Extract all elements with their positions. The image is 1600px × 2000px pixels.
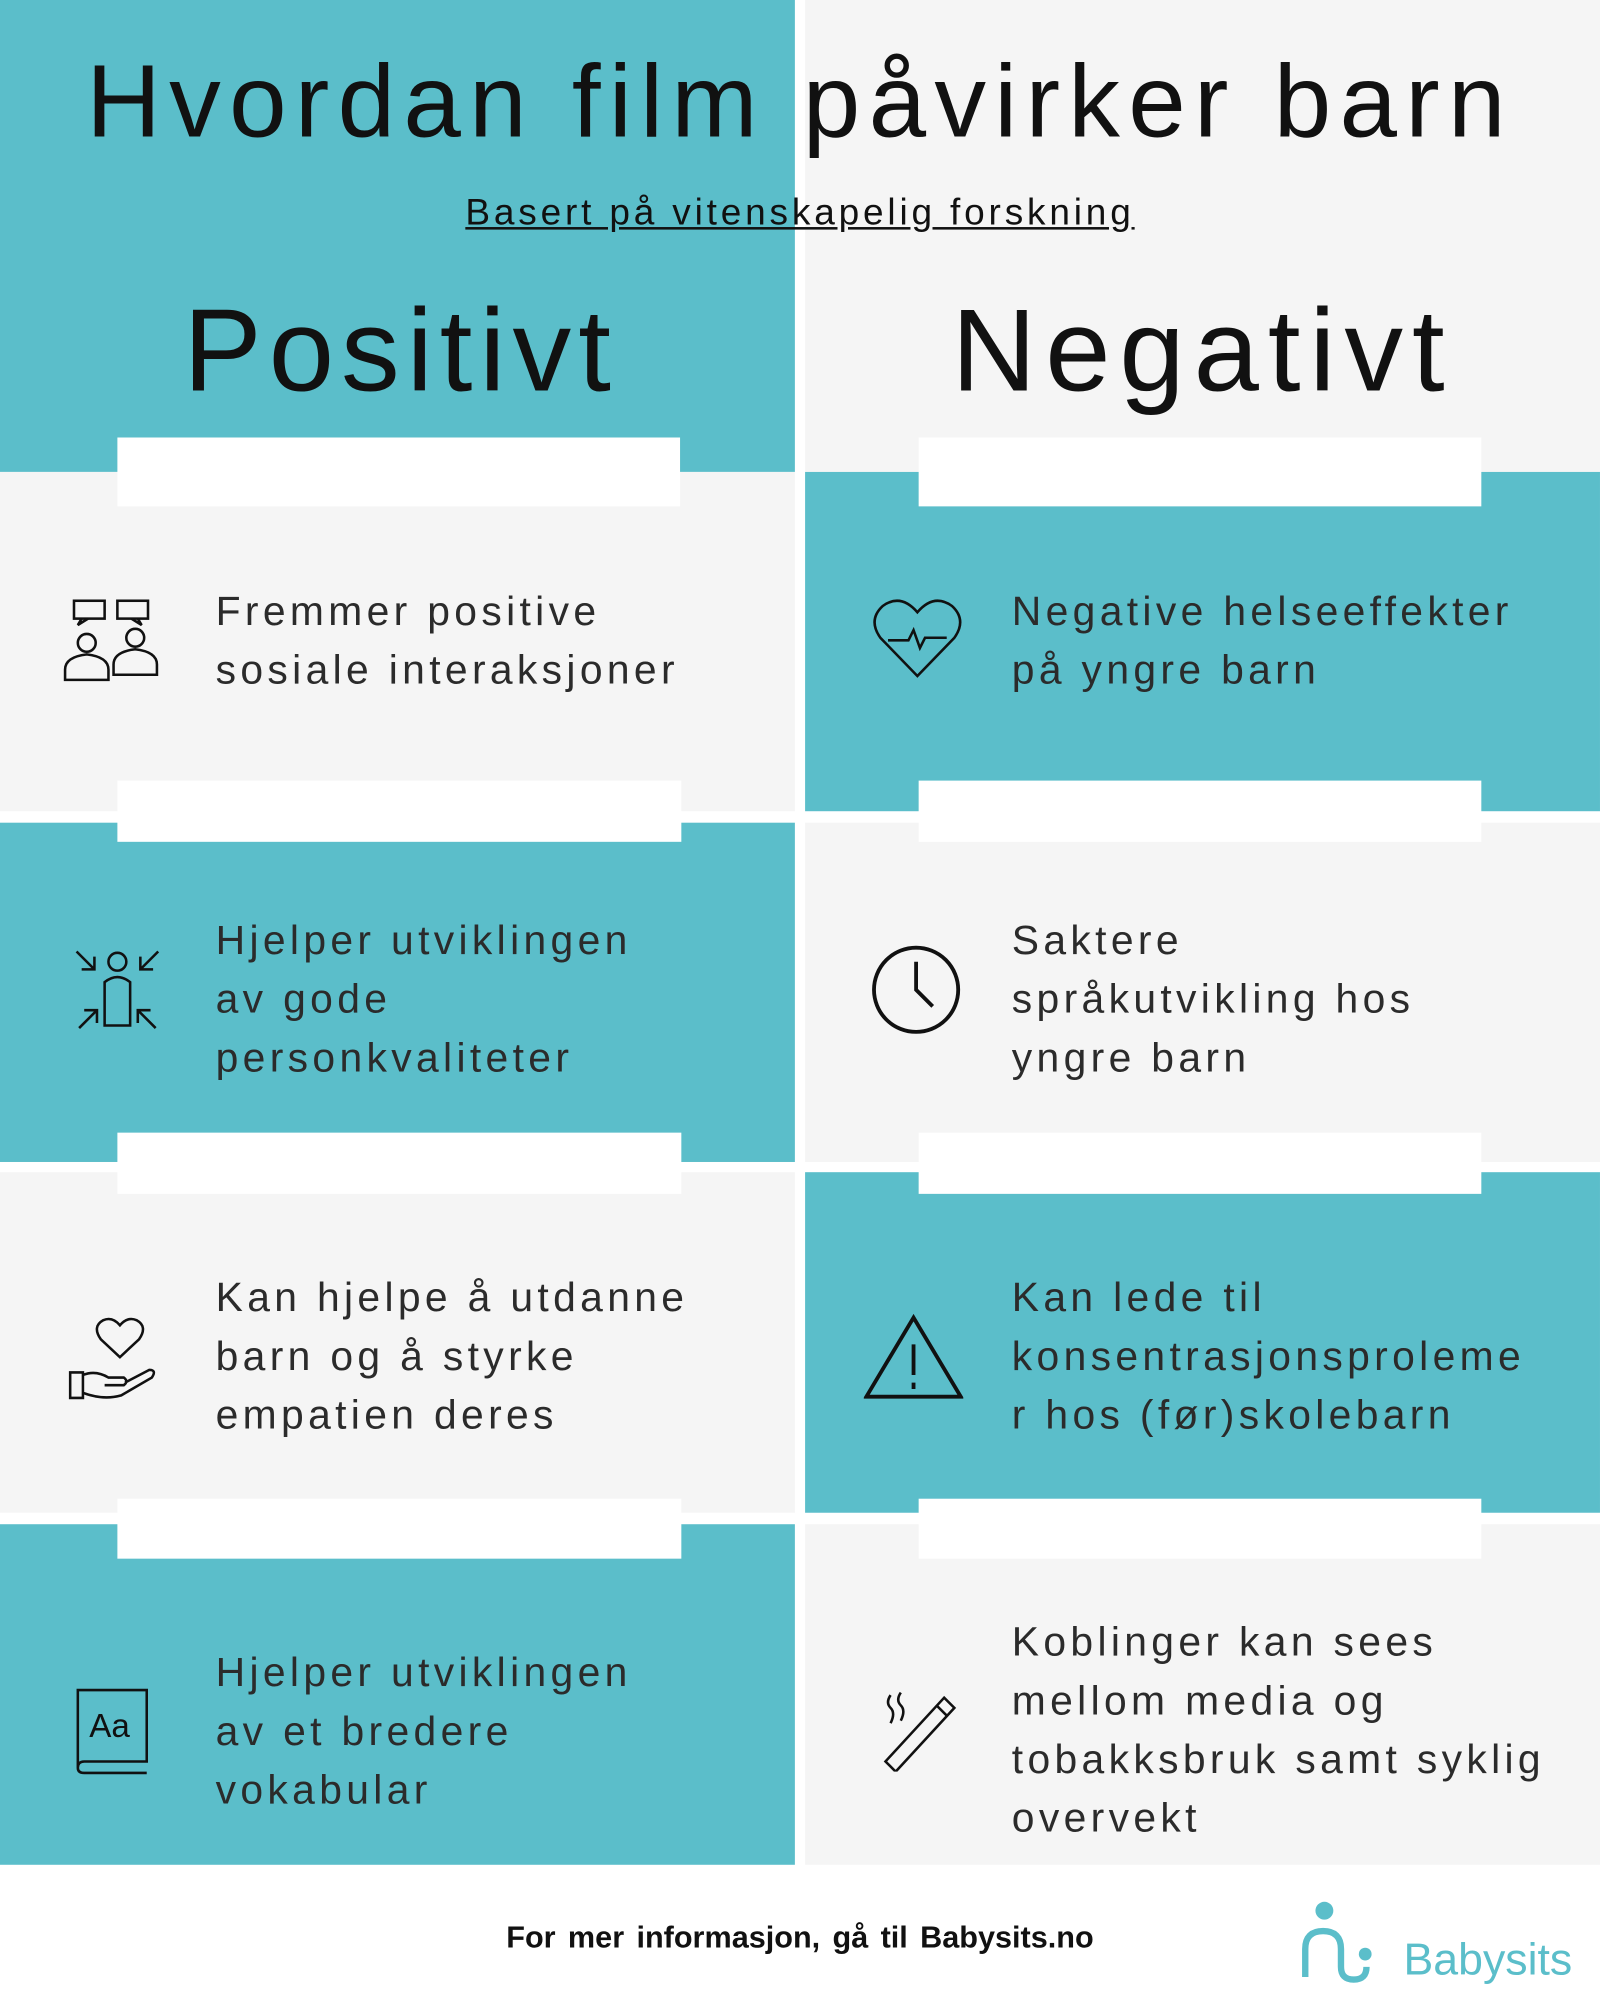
text: negative 3: Kan lede til: [1012, 1274, 1266, 1320]
panel: left rows: [0, 472, 795, 1865]
logo: Babysits: [1302, 1902, 1572, 1985]
text: positive 4: Hjelper utviklingen: [216, 1649, 632, 1695]
text: positive 4: av et bredere: [216, 1708, 513, 1754]
text: positive 1: [216, 588, 679, 693]
text: positive 3: empatien deres: [216, 1392, 558, 1437]
icon: book Aa: Aa: [89, 1708, 130, 1745]
text: negative 3: konsentrasjonsproleme: [1012, 1333, 1525, 1379]
text: positive 4: vokabular: [216, 1767, 432, 1812]
text: positive 1: Fremmer positive: [216, 588, 600, 634]
background: left top teal: [0, 0, 795, 472]
text: positive 2: personkvaliteter: [216, 1034, 573, 1080]
background: right top gray: [805, 0, 1600, 472]
text: negative 1: Negative helseeffekter: [1012, 588, 1513, 634]
text: positive 3: barn og å styrke: [216, 1333, 578, 1379]
text: negative 2: [1012, 917, 1414, 1080]
panel: right rows: [805, 472, 1600, 1864]
heading: Positivt: Positivt: [183, 286, 618, 416]
heading: Negativt: Negativt: [952, 286, 1454, 416]
icon: people chatting: [64, 600, 158, 682]
text: positive 3: [216, 1274, 688, 1437]
text: negative 4: tobakksbruk samt syklig: [1012, 1736, 1545, 1782]
icon: heart pulse: [873, 599, 962, 678]
icon: clock: [872, 946, 960, 1034]
text: positive 4: [216, 1649, 632, 1812]
icon: book Aa: [76, 1688, 148, 1774]
white tabs: [117, 437, 680, 506]
icon: hand with heart: [68, 1318, 156, 1400]
text: negative 4: mellom media og: [1012, 1677, 1388, 1723]
logo: Babysits: Babysits: [1403, 1935, 1572, 1985]
text: negative 2: yngre barn: [1012, 1034, 1250, 1080]
text: negative 3: [1012, 1274, 1525, 1437]
subtitle: Basert på vitenskapelig forskning: [465, 193, 1135, 233]
text: positive 2: av gode: [216, 976, 391, 1022]
text: negative 2: språkutvikling hos: [1012, 976, 1414, 1022]
footer text: For mer informasjon, gå til Babysits.no: [506, 1921, 1094, 1955]
text: negative 2: Saktere: [1012, 917, 1183, 963]
text: positive 2: [216, 917, 632, 1080]
icon: person with arrows: [76, 950, 160, 1029]
text: negative 3: r hos (før)skolebarn: [1012, 1392, 1455, 1437]
text: negative 4: [1012, 1619, 1545, 1841]
title: Hvordan film påvirker barn: [86, 45, 1514, 159]
text: positive 1: sosiale interaksjoner: [216, 647, 679, 693]
icon: cigarette: [884, 1692, 956, 1772]
text: positive 3: Kan hjelpe å utdanne: [216, 1274, 688, 1320]
icon: warning triangle: [864, 1314, 964, 1399]
text: negative 1: [1012, 588, 1513, 693]
text: positive 2: Hjelper utviklingen: [216, 917, 632, 963]
text: negative 4: overvekt: [1012, 1795, 1201, 1841]
text: negative 1: på yngre barn: [1012, 647, 1320, 693]
text: negative 4: Koblinger kan sees: [1012, 1619, 1437, 1665]
